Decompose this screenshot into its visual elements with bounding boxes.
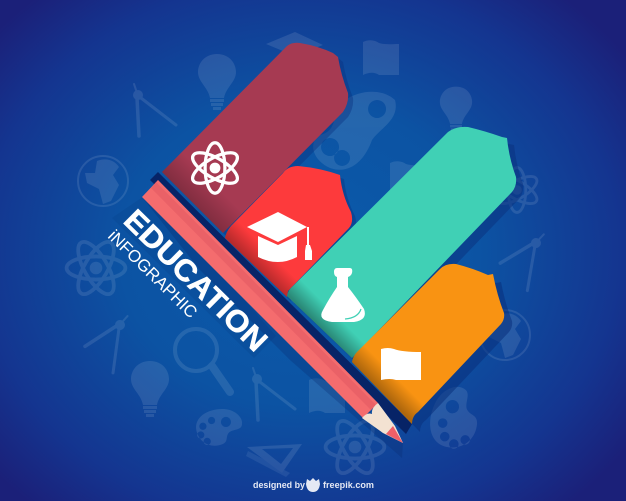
panel: teal band	[287, 127, 516, 358]
gap shadow between pencil and bands	[150, 172, 412, 434]
panel: maroon band	[162, 43, 348, 233]
pencil body	[142, 180, 378, 418]
icon: atom white	[188, 143, 242, 193]
pencil shadow	[142, 197, 403, 458]
icon: set square	[246, 444, 302, 477]
panel: orange band	[352, 264, 504, 424]
red band shadow	[229, 170, 356, 301]
icon: compass right	[497, 233, 564, 296]
credit text right: freepik.com	[323, 480, 374, 491]
icon: book top	[363, 40, 399, 75]
icon: atom bottom	[326, 416, 384, 478]
icon: atom right	[493, 168, 541, 212]
icon: graduation cap	[247, 212, 312, 262]
icon: magnifier	[175, 329, 230, 392]
title shadow band	[112, 192, 276, 358]
subheading: INFOGRAPHIC: iNFOGRAPHIC	[104, 226, 201, 322]
icon: light bulb bottom	[131, 361, 169, 417]
orange band shadow	[360, 272, 512, 432]
icon: freepik crown	[306, 478, 320, 492]
icon: compass bottom	[252, 368, 295, 420]
icon: globe left	[78, 156, 128, 206]
credit text left: designed by	[253, 480, 306, 491]
maroon band shadow	[167, 48, 353, 238]
icon: light bulb top	[198, 54, 236, 110]
icon: compass left	[82, 315, 149, 378]
icon: graduation cap top	[266, 32, 323, 56]
icon: palette right bottom	[420, 380, 490, 456]
icon: book lower	[309, 378, 345, 413]
pencil wood tip	[362, 403, 403, 443]
teal band shadow	[294, 134, 523, 365]
heading: EDUCATION: EDUCATION	[117, 203, 273, 358]
icon: globe right	[480, 310, 530, 360]
panel: red band	[225, 166, 352, 297]
credit line	[253, 478, 374, 492]
icon: flask	[321, 268, 365, 322]
icon: open book	[381, 348, 421, 380]
pencil	[142, 180, 403, 443]
icon: book middle	[390, 161, 426, 196]
pencil lead	[386, 426, 403, 443]
icon: large palette	[313, 92, 396, 170]
icon: palette bottom	[196, 409, 242, 446]
icon: atom left	[67, 237, 125, 299]
icon: bulb right	[440, 87, 472, 134]
faint background icons	[67, 32, 564, 478]
title	[104, 203, 273, 358]
icon: compass top left	[133, 84, 176, 136]
